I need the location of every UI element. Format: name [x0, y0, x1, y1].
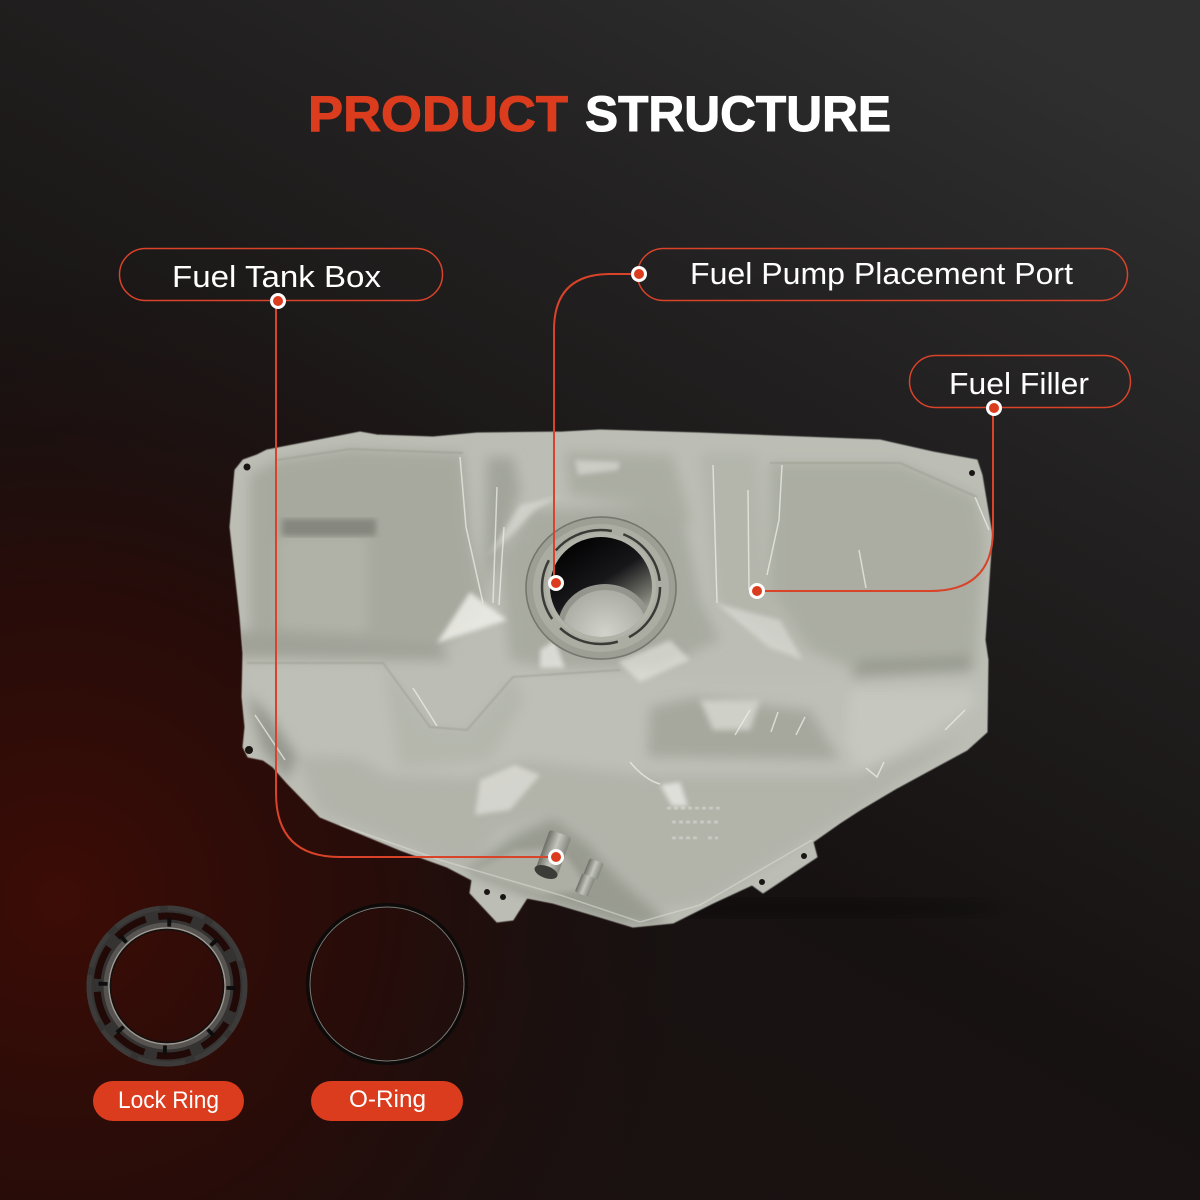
right lower panel	[862, 698, 962, 757]
callout: Fuel Pump Placement Port: Fuel Pump Placement Port	[690, 256, 1073, 291]
filler necks	[533, 830, 604, 897]
panel boundary lines	[247, 449, 977, 730]
label: Lock Ring	[93, 1081, 244, 1121]
lower surface	[306, 758, 921, 906]
filler pad	[566, 452, 685, 510]
mounting holes	[244, 464, 975, 900]
rear recess	[647, 697, 840, 760]
label: O-Ring	[311, 1081, 463, 1121]
title	[308, 86, 891, 142]
upper left inner panel	[285, 544, 360, 624]
callout: Fuel Pump Placement Port	[548, 248, 1128, 591]
fuel tank illustration	[89, 248, 1130, 1121]
fuel pump port	[525, 516, 677, 670]
icon: O-ring	[308, 906, 466, 1062]
lower ledge	[247, 663, 977, 775]
title: PRODUCT	[308, 86, 568, 142]
upper right panel	[770, 463, 985, 672]
callout: Fuel Filler	[749, 356, 1130, 599]
callout: Fuel Filler: Fuel Filler	[949, 366, 1089, 401]
bottom seam	[340, 825, 812, 922]
lower panel shade	[225, 630, 450, 660]
left dark strip	[247, 693, 297, 780]
label: Lock Ring: Lock Ring	[118, 1087, 219, 1114]
callout: Fuel Tank Box	[120, 248, 564, 865]
right groove band	[708, 460, 775, 616]
callout: Fuel Tank Box: Fuel Tank Box	[172, 259, 382, 294]
icon: lock ring	[89, 908, 245, 1064]
tank shadow	[600, 899, 1000, 917]
filler trough	[465, 818, 670, 925]
white highlight blobs	[437, 460, 803, 815]
tank body	[230, 430, 992, 927]
dark upper left smudge	[282, 519, 376, 536]
recess left well	[394, 690, 516, 760]
central rise	[500, 505, 720, 668]
speckled recess highlight	[700, 700, 760, 730]
upper left panel	[250, 449, 484, 655]
trough highlight	[478, 848, 580, 894]
embossed part numbers	[667, 808, 720, 838]
title: STRUCTURE	[585, 86, 891, 142]
label: O-Ring: O-Ring	[349, 1086, 426, 1113]
glossy edge lines	[255, 457, 989, 784]
central groove	[484, 457, 520, 600]
